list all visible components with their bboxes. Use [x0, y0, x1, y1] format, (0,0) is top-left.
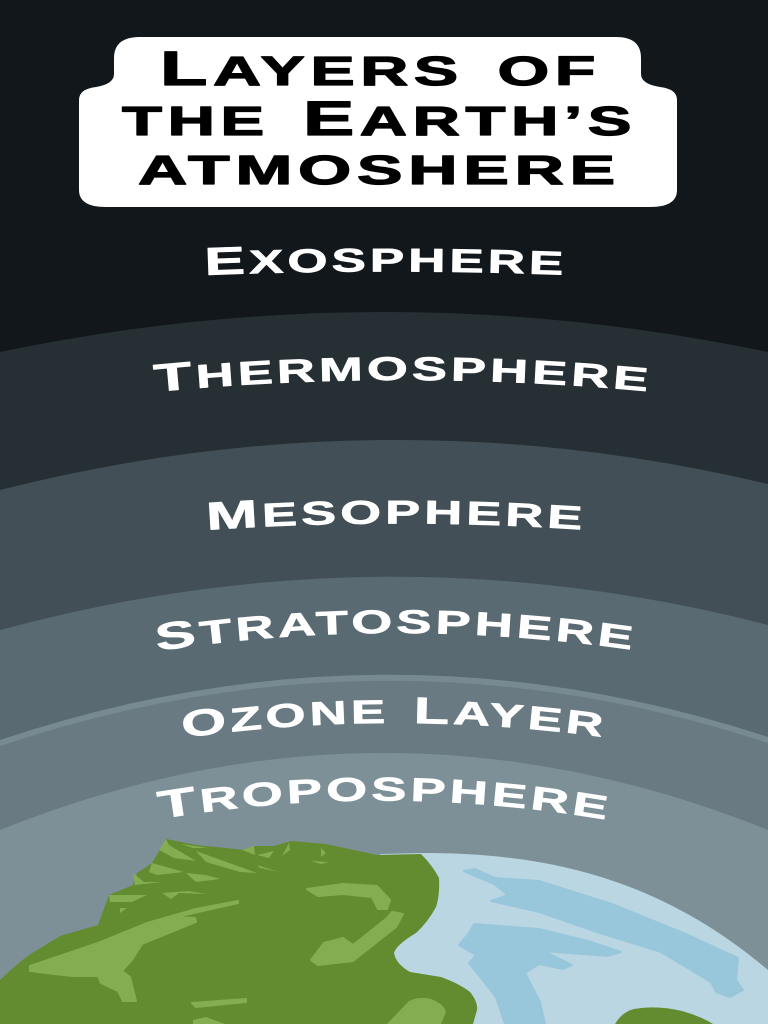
ozone layer inner band [0, 681, 768, 1024]
label: mesosphere: M ESOPHERE [208, 500, 580, 530]
ocean current lower [459, 924, 621, 1024]
title [122, 43, 637, 193]
land highlights [30, 839, 446, 1024]
earth illustration [0, 839, 768, 1024]
thermosphere band [0, 312, 768, 1024]
ocean [380, 853, 768, 1024]
title plaque [79, 37, 677, 207]
ocean current upper [464, 869, 743, 997]
title line 1: L AYERS OF [160, 43, 601, 96]
label: thermosphere: T HERMOSPHERE [152, 356, 647, 392]
title line 2: THE E ARTH’S [122, 93, 637, 146]
stratosphere band [0, 577, 768, 1024]
label: exosphere: E XOSPHERE [208, 246, 562, 276]
label: troposphere: T ROPOSPHERE [156, 777, 607, 820]
title line 3: ATMOSHERE [138, 147, 621, 193]
small island [615, 1007, 713, 1024]
main landmass [0, 839, 477, 1024]
label: ozone layer: O ZONE L AYER [183, 697, 602, 737]
label: stratosphere: S TRATOSPHERE [157, 610, 632, 650]
troposphere band [0, 753, 768, 1024]
mesosphere band [0, 440, 768, 1024]
ozone layer band [0, 675, 768, 1024]
